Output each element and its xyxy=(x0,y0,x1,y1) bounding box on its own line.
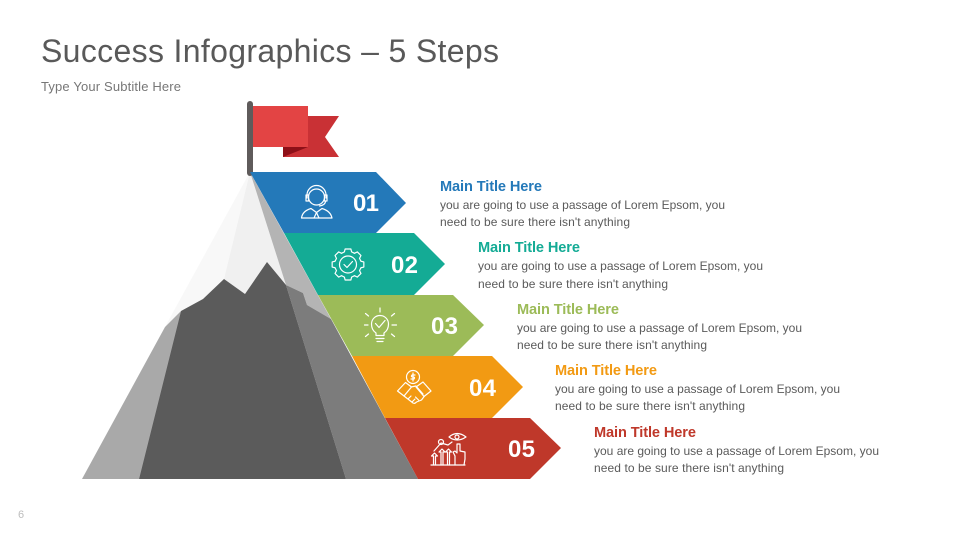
step 3 arrow xyxy=(318,295,484,356)
icon: support agent xyxy=(302,186,332,218)
page number: 6 xyxy=(18,509,24,521)
step 2 arrow xyxy=(284,233,445,295)
step 5 arrow xyxy=(385,418,561,479)
step 4 text: Main Title Here xyxy=(555,363,657,379)
icon: light bulb xyxy=(364,308,396,342)
step 2 arrow: 02 xyxy=(391,252,418,279)
title: Success Infographics – 5 Steps xyxy=(41,33,499,69)
step 3 text: you are going to use a passage of Lorem Epsom, you xyxy=(517,321,802,335)
step 5 text: you are going to use a passage of Lorem Epsom, you xyxy=(594,444,879,458)
step 3 text: Main Title Here xyxy=(517,302,619,318)
step 5 arrow: 05 xyxy=(508,436,535,463)
step 4 text xyxy=(555,363,840,413)
step 2 text xyxy=(478,240,763,291)
step 2 text: need to be sure there isn't anything xyxy=(478,277,668,291)
step 1 text: Main Title Here xyxy=(440,179,542,195)
step 3 text: need to be sure there isn't anything xyxy=(517,338,707,352)
step 2 text: Main Title Here xyxy=(478,240,580,256)
step 1 text: need to be sure there isn't anything xyxy=(440,215,630,229)
step 1 arrow: 01 xyxy=(353,190,379,217)
step 1 text: you are going to use a passage of Lorem Epsom, you xyxy=(440,198,725,212)
step 5 text xyxy=(594,425,879,475)
icon: gear with check xyxy=(332,249,364,280)
step 3 arrow: 03 xyxy=(431,313,458,340)
subtitle: Type Your Subtitle Here xyxy=(41,79,181,94)
step 4 text: you are going to use a passage of Lorem Epsom, you xyxy=(555,382,840,396)
step 2 text: you are going to use a passage of Lorem Epsom, you xyxy=(478,259,763,273)
step 1 text xyxy=(440,179,725,229)
flag xyxy=(247,101,339,176)
step 4 text: need to be sure there isn't anything xyxy=(555,399,745,413)
icon: handshake with coin xyxy=(398,370,431,403)
step 4 arrow xyxy=(352,356,523,418)
step 4 arrow: 04 xyxy=(469,375,497,402)
step 1 arrow xyxy=(250,172,406,233)
step 5 text: need to be sure there isn't anything xyxy=(594,461,784,475)
step 3 text xyxy=(517,302,802,352)
icon: growth chart with hand xyxy=(431,434,466,465)
step 5 text: Main Title Here xyxy=(594,425,696,441)
mountain xyxy=(82,172,418,479)
